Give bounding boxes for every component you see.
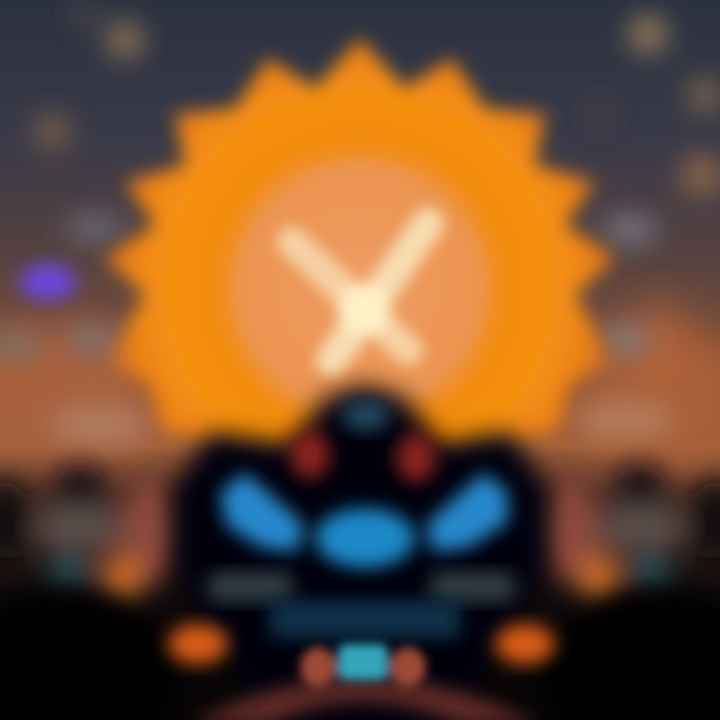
- base arc: [190, 678, 540, 720]
- robot grey vents: [208, 572, 515, 602]
- X mark: [292, 224, 428, 360]
- foreground dark corners: [0, 590, 720, 720]
- orange lights: [168, 624, 555, 664]
- purple glow: [20, 263, 76, 301]
- sun with spikes: [104, 38, 616, 450]
- horizon city glow: [0, 300, 720, 470]
- robot red accents: [290, 431, 436, 482]
- central robot silhouette: [172, 385, 548, 720]
- robot blue panels: [220, 472, 508, 568]
- crowd silhouettes left and right: [0, 464, 720, 604]
- robot head highlight: [342, 399, 390, 431]
- robot lower blue band: [270, 600, 460, 638]
- cyan base light: [300, 644, 426, 687]
- background stars: [0, 3, 720, 445]
- sun inner disc: [210, 138, 510, 438]
